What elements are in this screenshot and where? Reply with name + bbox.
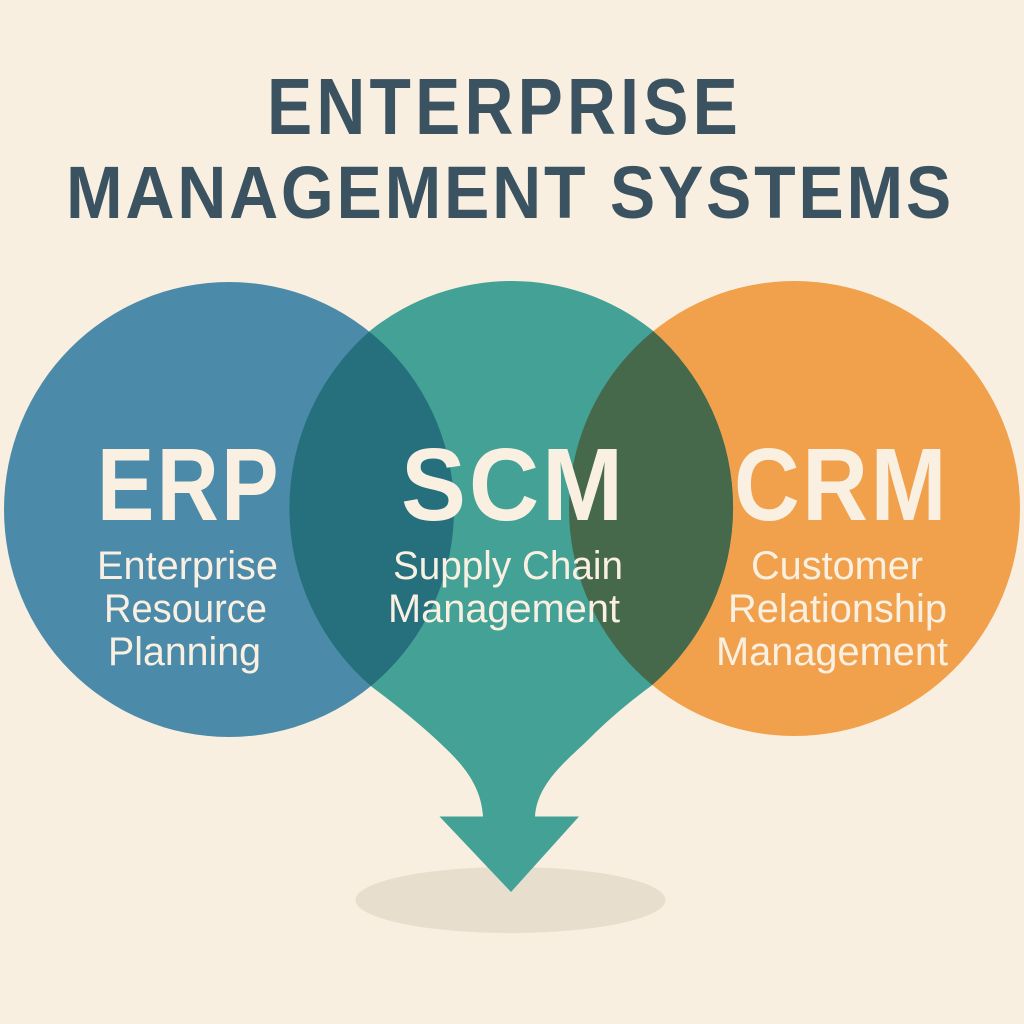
circle: ERP (4, 282, 454, 737)
SCM label (388, 427, 626, 631)
overlap: ERP and SCM (289, 332, 454, 686)
circle: CRM (569, 281, 1020, 736)
ground shadow ellipse (356, 867, 666, 933)
CRM label: Customer (751, 544, 923, 588)
ERP label: Resource (104, 587, 267, 631)
CRM label: Management (716, 630, 948, 674)
SCM label: Supply Chain (393, 544, 623, 588)
arrow circle: SCM (289, 281, 733, 892)
SCM label: Management (388, 587, 620, 631)
title (66, 62, 954, 234)
title: MANAGEMENT SYSTEMS (66, 151, 954, 234)
title: ENTERPRISE (267, 62, 742, 151)
CRM label: CRM (734, 427, 949, 542)
ERP label: Enterprise (97, 544, 278, 588)
CRM label (716, 427, 949, 674)
SCM label: SCM (401, 427, 626, 542)
ERP label: ERP (97, 427, 281, 542)
ERP label (97, 427, 281, 674)
ERP label: Planning (108, 630, 261, 674)
CRM label: Relationship (728, 587, 947, 631)
overlap: SCM and CRM (569, 331, 734, 685)
